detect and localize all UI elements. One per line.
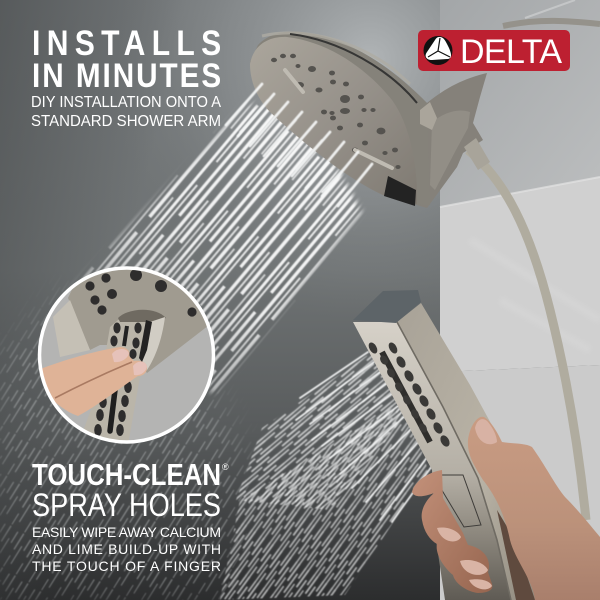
spray holes on head face — [271, 54, 401, 169]
main shower head — [226, 32, 490, 208]
logo wordmark: DELTA — [460, 33, 562, 71]
shower arm hose at top — [503, 0, 600, 26]
long slots on head face — [285, 70, 392, 168]
dark strip beside wand — [497, 510, 535, 600]
inset circle: touch-clean detail — [36, 262, 222, 445]
wand front face — [353, 322, 511, 600]
wand spray holes — [367, 341, 451, 448]
title line 2: SPRAY HOLES — [32, 487, 221, 523]
inset fingers — [36, 347, 147, 416]
wand side — [397, 303, 536, 600]
head rim — [250, 32, 430, 205]
install description: DIY INSTALLATION ONTO A — [31, 94, 221, 111]
button outline on wand — [440, 475, 481, 527]
Delta logo — [418, 30, 570, 71]
spray streaks overlapping head — [226, 84, 372, 206]
heading: touch-clean spray holes: AND LIME BUILD-UP WITH — [32, 541, 221, 557]
hand holding wand — [412, 417, 600, 600]
faint spray continuing past inset — [0, 294, 258, 600]
central slot — [382, 352, 430, 442]
wand edge highlight — [397, 322, 511, 600]
title line 1: INSTALLS — [32, 23, 221, 63]
spray from main shower head — [80, 101, 364, 396]
dark slot at bottom of head — [384, 176, 416, 206]
upper hand spray — [236, 352, 410, 510]
head neck and body — [410, 73, 487, 208]
inset left strip — [53, 300, 90, 357]
braided hose — [468, 150, 586, 520]
heading: touch-clean spray holes: THE TOUCH OF A FINGER — [32, 558, 221, 574]
logo emblem — [424, 36, 452, 65]
title line 1: TOUCH-CLEAN — [32, 457, 221, 492]
inset nozzle recess — [118, 310, 166, 322]
hand shower wand — [353, 290, 536, 600]
thumbnail — [475, 419, 497, 444]
fingers — [412, 470, 492, 593]
swivel knob — [420, 102, 437, 130]
heading: installs in minutes: STANDARD SHOWER ARM — [31, 113, 221, 130]
inset wand — [84, 320, 147, 440]
lower hand spray — [220, 400, 428, 600]
hand palm and thumb — [468, 417, 600, 600]
title line 2: IN MINUTES — [32, 56, 221, 95]
wand top face — [353, 290, 421, 323]
inset finger nails — [112, 349, 147, 375]
bright streaks near nozzle — [296, 352, 432, 522]
hand shower spray — [220, 352, 432, 600]
heading: installs in minutes — [31, 23, 221, 130]
touch-clean description: EASILY WIPE AWAY CALCIUM — [32, 524, 221, 540]
inset head metal — [68, 270, 207, 373]
hose connector — [464, 138, 490, 170]
head face — [250, 37, 417, 204]
inset holes — [85, 269, 197, 436]
heading: touch-clean spray holes — [32, 457, 229, 574]
registered mark: ® — [222, 462, 229, 472]
finger nails — [437, 527, 492, 589]
